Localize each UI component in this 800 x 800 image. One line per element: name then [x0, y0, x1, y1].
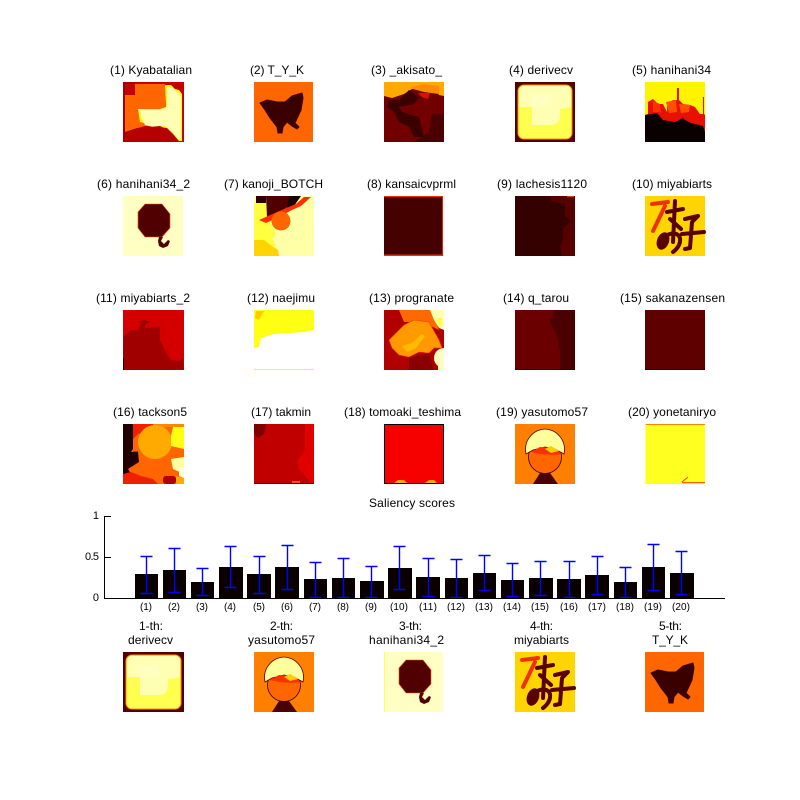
name label: derivecv: [128, 633, 173, 647]
label: (4) derivecv: [509, 63, 573, 77]
y-axis labels: [85, 510, 99, 604]
y-axis labels: 0.5: [85, 551, 99, 563]
panel: (11) miyabiarts_2: [96, 291, 190, 370]
heatmap: [123, 310, 184, 370]
panel: (3) _akisato_: [371, 63, 444, 142]
label: (10) miyabiarts: [632, 177, 712, 191]
bars: [135, 567, 694, 598]
x-axis labels: (10): [390, 602, 408, 613]
label: (2) T_Y_K: [250, 63, 304, 77]
heatmap: [384, 652, 443, 712]
panel: (15) sakanazensen: [620, 291, 725, 370]
x-axis labels: (20): [672, 602, 690, 613]
panel: (18) tomoaki_teshima: [344, 405, 461, 484]
rank label: 2-th:: [270, 619, 293, 633]
heatmap: [515, 652, 575, 712]
heatmap: [384, 82, 444, 142]
panel: (17) takmin: [251, 405, 314, 484]
heatmap: [515, 310, 575, 370]
label: (20) yonetaniryo: [628, 405, 716, 419]
label: (17) takmin: [251, 405, 311, 419]
panel: (8) kansaicvprml: [367, 177, 456, 256]
x-axis labels: (16): [560, 602, 578, 613]
heatmap: [645, 652, 704, 712]
error bars: [140, 544, 688, 598]
label: (18) tomoaki_teshima: [344, 405, 461, 419]
rank label: 3-th:: [399, 619, 422, 633]
name label: yasutomo57: [248, 633, 315, 647]
heatmap: [515, 424, 575, 484]
label: (16) tackson5: [113, 405, 187, 419]
panel: (19) yasutomo57: [496, 405, 588, 484]
heatmap: [645, 196, 705, 256]
label: (5) hanihani34: [632, 63, 711, 77]
panel: (14) q_tarou: [503, 291, 575, 370]
label: (1) Kyabatalian: [110, 63, 192, 77]
panel: 3-th hanihani34_2: [369, 619, 444, 712]
name label: T_Y_K: [652, 633, 688, 647]
x-axis labels: (17): [588, 602, 606, 613]
label: (8) kansaicvprml: [367, 177, 456, 191]
heatmap: [515, 196, 575, 256]
panel: (13) progranate: [369, 291, 454, 370]
panel: (5) hanihani34: [632, 63, 711, 142]
heatmap: [254, 82, 313, 142]
label: (11) miyabiarts_2: [96, 291, 190, 305]
x-axis labels: (7): [309, 602, 321, 613]
x-axis labels: (9): [365, 602, 377, 613]
heatmap: [123, 82, 184, 142]
panel: 2-th yasutomo57: [248, 619, 315, 712]
heatmap: [123, 196, 183, 256]
label: (6) hanihani34_2: [97, 177, 190, 191]
x-axis labels: (4): [224, 602, 236, 613]
x-axis labels: (6): [281, 602, 293, 613]
y-axis labels: 0: [93, 592, 99, 604]
y-axis labels: 1: [93, 510, 99, 522]
bar chart: saliency scores: [85, 496, 725, 613]
panel: 4-th miyabiarts: [514, 619, 575, 712]
label: (3) _akisato_: [371, 63, 442, 77]
rank label: 5-th:: [659, 619, 682, 633]
heatmap: [123, 424, 184, 484]
x-axis labels: (19): [644, 602, 662, 613]
panel: (16) tackson5: [113, 405, 187, 484]
name label: hanihani34_2: [369, 633, 444, 647]
heatmap: [254, 310, 314, 370]
panel: (9) lachesis1120: [497, 177, 587, 256]
heatmap: [515, 82, 575, 142]
heatmap: [384, 310, 444, 370]
x-axis labels: (18): [616, 602, 634, 613]
heatmap: [384, 196, 443, 256]
panel: (10) miyabiarts: [632, 177, 712, 256]
x-axis labels: [140, 602, 690, 613]
panel: 1-th derivecv: [123, 619, 184, 712]
panel: (2) T_Y_K: [250, 63, 313, 142]
panel: (12) naejimu: [247, 291, 315, 370]
label: (9) lachesis1120: [497, 177, 587, 191]
panel: (20) yonetaniryo: [628, 405, 716, 484]
label: (13) progranate: [369, 291, 454, 305]
x-axis labels: (8): [337, 602, 349, 613]
label: (12) naejimu: [247, 291, 315, 305]
label: (19) yasutomo57: [496, 405, 588, 419]
label: (7) kanoji_BOTCH: [224, 177, 323, 191]
heatmap: [254, 652, 314, 712]
heatmap: [254, 424, 314, 484]
x-axis labels: (2): [168, 602, 180, 613]
x-axis labels: (5): [253, 602, 265, 613]
rank label: 1-th:: [139, 619, 163, 633]
chart title: Saliency scores: [369, 496, 455, 510]
heatmap: [645, 424, 705, 484]
axes: [104, 516, 725, 598]
panel: (7) kanoji_BOTCH: [224, 177, 323, 256]
heatmap: [384, 424, 444, 484]
x-axis labels: (1): [140, 602, 152, 613]
x-axis labels: (14): [503, 602, 521, 613]
heatmap: [645, 310, 705, 370]
x-axis labels: (3): [196, 602, 208, 613]
panel: (4) derivecv: [509, 63, 575, 142]
heatmap: [645, 82, 705, 142]
x-axis labels: (11): [419, 602, 437, 613]
rank label: 4-th:: [530, 619, 553, 633]
panel: 5-th T_Y_K: [645, 619, 704, 712]
heatmap: [123, 652, 184, 712]
label: (14) q_tarou: [503, 291, 569, 305]
x-axis labels: (15): [531, 602, 549, 613]
name label: miyabiarts: [514, 633, 569, 647]
label: (15) sakanazensen: [620, 291, 725, 305]
x-axis labels: (12): [447, 602, 465, 613]
heatmap: [254, 196, 314, 256]
panel: (6) hanihani34_2: [97, 177, 190, 256]
x-axis labels: (13): [475, 602, 493, 613]
panel: (1) Kyabatalian: [110, 63, 192, 142]
